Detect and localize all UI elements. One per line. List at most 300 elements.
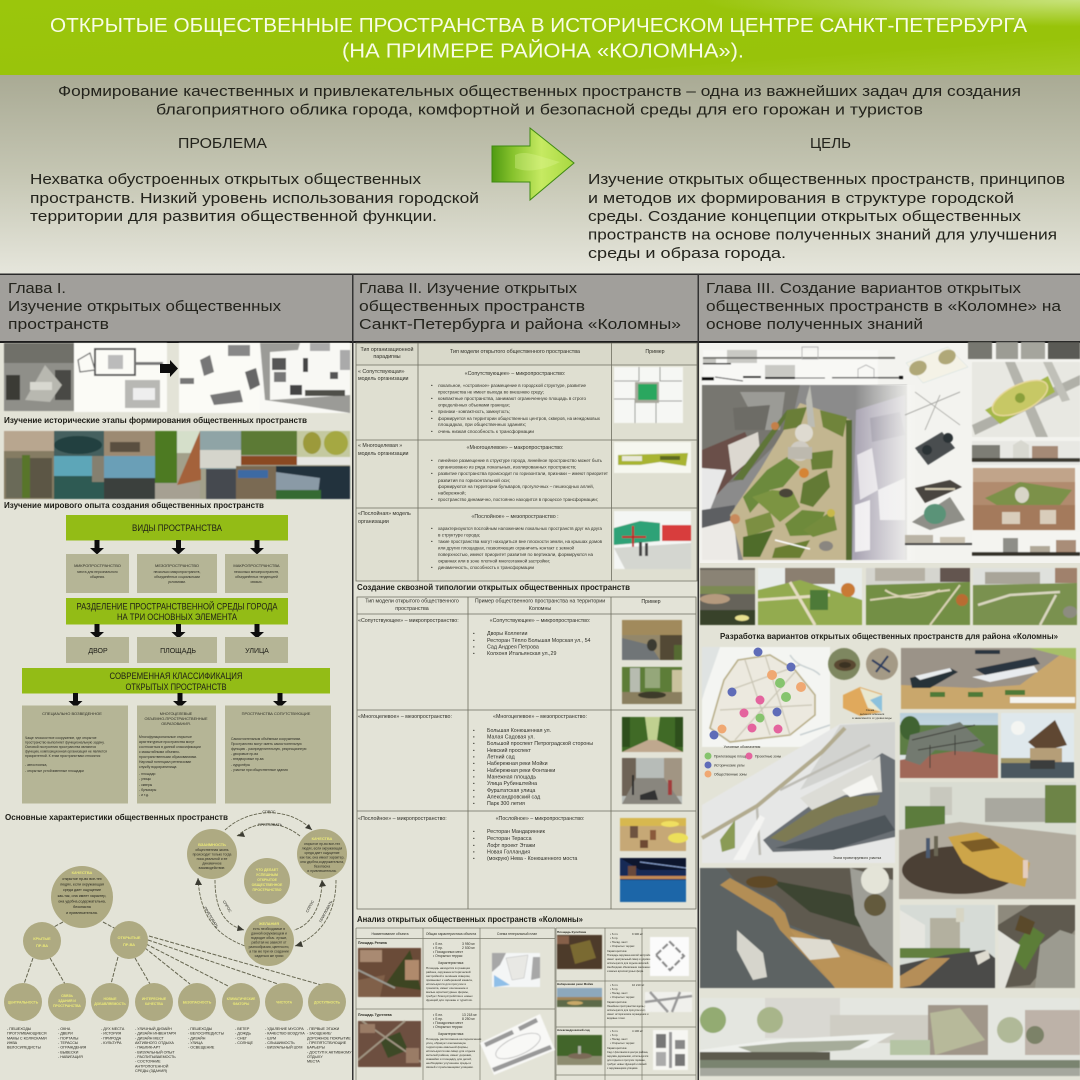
row: multipurpose model: набережной;	[438, 490, 466, 496]
box: accompanying: - внедворовые пр-ва	[231, 757, 264, 761]
caption: main characteristics: Основные характеристики общественных пространств	[5, 813, 228, 822]
example image: linear plan	[614, 442, 691, 473]
row: layered model: организации	[358, 519, 389, 525]
row: accompanying model: формируется на территории общественных центров, скверов, на междомовых	[438, 416, 601, 421]
object: Repin square: требует благоустройства и новых	[426, 994, 473, 998]
heading: chapter III: Глава III. Создание вариантов открытых	[706, 281, 1022, 297]
circle: quality: КАЧЕСТВА	[312, 836, 333, 841]
row: multipurpose: •	[473, 734, 475, 740]
goal text: среды и образа города.	[588, 246, 786, 262]
box: accompanying: - участки при общественные здания	[231, 768, 288, 772]
circle: identity: НОВЫЕ	[103, 997, 117, 1001]
circle: interaction: происходит только тогда	[193, 852, 232, 856]
list: pedestrians: - ПЕШЕХОДЫ	[7, 1027, 31, 1031]
circle: quality: и привлекательна.	[307, 869, 337, 873]
map legend: Условные обозначения	[724, 745, 760, 749]
site plan of embankment	[702, 722, 895, 863]
object: Alexander garden: Характеристика:	[607, 1046, 627, 1050]
object: Yusupov garden column: • Открытых террас	[610, 944, 635, 948]
object: Repin square: примыкает к набережной канала,	[426, 978, 473, 982]
table header: Схема генеральный план	[497, 932, 537, 936]
table header: Коломны	[529, 606, 551, 612]
row: multipurpose: Набережная реки Фонтанки	[487, 768, 555, 774]
row: multipurpose: Набережная реки Мойки	[487, 760, 548, 767]
circle: wishes	[244, 916, 294, 966]
site plan of embankment: Эскиз проектируемого участка	[833, 856, 881, 860]
green bar: modern classification: СОВРЕМЕННАЯ КЛАССИФИКАЦИЯ	[110, 671, 243, 682]
box: micro: места для персонального	[77, 570, 118, 574]
diagram: qualities tree	[4, 866, 352, 1073]
table header	[365, 598, 661, 612]
row: multipurpose: •	[473, 754, 475, 760]
circle: qualities: среда дает ощущение	[63, 888, 101, 892]
box: meso: несколько микропространств,	[154, 570, 200, 574]
object: Turgenev square	[358, 1013, 555, 1075]
circle: building connection: ПРОСТРАНСТВА	[53, 1004, 81, 1008]
object: Turgenev square: необходимо улучшение среды и	[426, 1061, 471, 1065]
row: layered: «Послойное» – микропространство:	[496, 815, 584, 822]
panel: chapter III column	[700, 342, 1080, 1076]
circle: qualities: как-так, она имеет характер,	[58, 894, 106, 898]
row: accompanying	[358, 618, 591, 657]
row: multipurpose	[358, 714, 593, 807]
panel: chapter I column	[4, 343, 352, 1073]
list: facades: - ОКНА	[58, 1027, 71, 1031]
list: street design: - СОСТОЯНИЕ	[135, 1060, 161, 1064]
goal text: Изучение открытых общественных пространств, принципов	[588, 172, 1065, 188]
list: access	[307, 1027, 352, 1064]
row: layered: Ресторан Терасса	[487, 836, 532, 842]
circle: climate: ФАКТОРЫ	[233, 1002, 249, 1006]
box: macro: объединённых тенденцией	[235, 575, 278, 579]
list: pedestrians: ПРОГУЛИВАЮЩИЕСЯ	[7, 1032, 47, 1036]
map legend: Прилегающие площади	[714, 754, 752, 758]
row: layered: •	[473, 836, 475, 841]
caption: analysis: Анализ открытых общественных пространств «Коломны»	[357, 915, 584, 924]
map legend: Общественные зоны	[714, 772, 747, 776]
row: accompanying: «Сопутствующее» – микропространство:	[358, 618, 459, 624]
heading: chapter II: Глава II. Изучение открытых	[359, 281, 578, 297]
list: facades: - ДВЕРИ	[58, 1032, 73, 1036]
title banner: (НА ПРИМЕРЕ РАЙОНА «КОЛОМНА»).	[342, 38, 744, 62]
rendering: top view of embankment park	[998, 905, 1075, 988]
row: multipurpose: •	[473, 794, 475, 800]
box: multipurpose: пространственными образованиями.	[139, 755, 197, 759]
circle: wishes: садиться же грязи	[255, 954, 283, 958]
object: Yusupov garden column: Площадь Кулибина	[557, 930, 586, 934]
goal text	[588, 172, 1065, 262]
diagram: demand cycle	[187, 810, 347, 966]
row: multipurpose model: пространство динамично, постоянно находится в процессе трансформации;	[438, 497, 598, 502]
rendering: pergola	[900, 713, 998, 778]
heading: chapter III: основе полученных знаний	[706, 317, 923, 333]
row: multipurpose model: «Многоцелевое» – макропространство:	[467, 445, 563, 451]
row: layered: (мокрую) Нева - Конюшенного моста	[487, 856, 577, 862]
list: weather: - СНЕГ	[235, 1036, 247, 1040]
object: Repin square: • Посадочных мест	[433, 950, 463, 954]
rendering: view along canal	[900, 905, 995, 988]
green bar: modern classification: ОТКРЫТЫХ ПРОСТРАНСТВ	[126, 682, 226, 693]
object: Turgenev square: • Посадочных мест	[433, 1021, 463, 1025]
object: Moika embankment: видовые точки.	[607, 1017, 626, 1020]
circle: identity: ДОБАВЛЯЕМОСТЬ	[94, 1002, 126, 1006]
box: specially built: Чаще плоскостное сооружение, где открытое	[25, 736, 97, 740]
object: Repin square: застройкой и зелёным сквером,	[426, 974, 470, 978]
object: Moika embankment: • Посад. мест	[610, 991, 628, 995]
list: weather	[235, 1027, 253, 1045]
object: Moika embankment: Характеристика:	[607, 1000, 627, 1004]
circle: quality: открытое пр-во все-тех	[304, 842, 340, 846]
lower section	[972, 532, 1080, 558]
box: accompanying	[225, 706, 331, 804]
rendering: riverside pavilion	[1001, 713, 1074, 778]
object: Repin square: малые архитектурные формы,	[426, 990, 469, 994]
row: layered model: характеризуются послойным наложением локальных пространств друг на друга	[438, 525, 602, 531]
row: multipurpose: Фурштатская улица	[487, 788, 535, 794]
title banner	[0, 0, 1080, 75]
intro statement: благоприятного облика города, комфортной и безопасной среды для его горожан и туристов	[156, 102, 923, 118]
heading: chapter I	[8, 281, 282, 333]
box: macro: связью.	[250, 580, 263, 584]
rendering: boats at pier	[901, 648, 1076, 709]
photo: evening embankment	[620, 858, 686, 902]
list: movement: - ВЕЛОСИПЕДИСТЫ	[188, 1032, 224, 1036]
list: cleanliness: - УДАЛЕНИЕ МУСОРА	[265, 1027, 304, 1031]
box: multipurpose	[137, 706, 216, 804]
circle: interesting qualities: КАЧЕСТВА	[145, 1002, 164, 1006]
object: Turgenev square: скамейки и площадку для детей,	[426, 1057, 472, 1061]
chapter header band	[0, 274, 1080, 1080]
object: Moika embankment: используется для прогулок и отдыха,	[607, 1009, 652, 1012]
object: Yusupov garden column: Площадь окружена жилой застройкой,	[607, 953, 654, 957]
site plan with green oval	[972, 362, 1080, 437]
row: multipurpose model: развития по горизонтальной оси;	[438, 477, 510, 483]
photo: pedestrian street	[622, 758, 682, 804]
map of Kolomna district	[702, 647, 830, 778]
object: Alexander garden: для отдыха и прогулок горожан,	[607, 1059, 646, 1062]
object: Turgenev square: 8 250 м²	[462, 1017, 476, 1021]
circle: what makes a successful space: ОТКРЫТОЕ	[257, 878, 278, 882]
table: typology	[357, 597, 696, 909]
object: Moika embankment: • S пл.	[610, 983, 619, 987]
table header: Тип организационной	[361, 346, 413, 353]
object: Moika embankment: Линейное пространство вдоль реки,	[607, 1004, 651, 1008]
object: Repin square: • Открытых террас	[433, 954, 463, 958]
object: Alexander garden: требует новых функций и связей	[607, 1062, 647, 1066]
box: multipurpose: - скверы	[139, 783, 153, 787]
circle: quality: как-так, она имеет характер,	[300, 856, 344, 860]
list: access: - ДОСТУП К АКТИВНОМУ	[307, 1050, 352, 1054]
example image: courtyard plan	[614, 367, 683, 423]
list: spirit of place: - ДУХ МЕСТА	[101, 1027, 125, 1031]
row: multipurpose: «Многоцелевое» – мезопространство:	[493, 714, 587, 720]
box: multipurpose: ОБРАЗОВАНИЯ.	[161, 722, 191, 726]
object: Alexander garden: окружён деревьями, используется	[607, 1054, 649, 1058]
object: Turgenev square: 13 218 м²	[462, 1013, 478, 1017]
table header	[371, 932, 537, 936]
circle: quality: она удобна,содержательна,	[300, 860, 344, 864]
object: Turgenev square: Характеристика:	[438, 1032, 464, 1036]
photo: avenue	[622, 717, 683, 752]
photo: terrace	[620, 818, 688, 851]
circle: interesting qualities: ИНТЕРЕСНЫЕ	[142, 997, 167, 1001]
box: multipurpose: ОБЪЕМНО-ПРОСТРАНСТВЕННЫЕ	[145, 717, 208, 721]
list: access: ОТДЫХУ	[307, 1055, 323, 1059]
table header: Общая характеристика объекта	[426, 932, 476, 936]
list: movement: - ПЕШЕХОДЫ	[188, 1027, 212, 1031]
box: specially built: - открытые устойчивенные площадки	[25, 769, 84, 773]
table header: Тип модели открытого общественного пространства	[450, 349, 580, 355]
box: micro: МИКРОПРОСТРАНСТВО	[74, 563, 121, 568]
box: accompanying: - дворовые пр-ва	[231, 752, 258, 756]
row: multipurpose model	[358, 443, 609, 502]
small plan fragments	[905, 347, 1070, 545]
heading: chapter II	[359, 281, 681, 333]
list: access: - ПРЕПЯТСТВУЮЩИЕ	[307, 1041, 347, 1045]
heading: chapter III: общественных пространств в «Коломне» на	[706, 299, 1062, 315]
row: accompanying: Сад Андрея Петрова	[487, 644, 539, 650]
project sheet: main view and plans	[700, 342, 1080, 563]
object: Turgenev square: жителей района, имеет дорожки,	[426, 1053, 472, 1057]
row: multipurpose: Парк 300 летия	[487, 801, 525, 807]
circle: building connection	[48, 983, 86, 1021]
row: multipurpose: •	[473, 801, 475, 806]
circle: wishes: разнообразия, цветности,	[249, 945, 289, 949]
box: macro: МАКРОПРОСТРАНСТВА	[233, 563, 280, 568]
list: access: БАРЬЕРЫ	[307, 1046, 325, 1050]
caption: variants development: Разработка вариантов открытых общественных пространств для района «Коломны»	[720, 632, 1059, 641]
circle: what makes a successful space: ОБЩЕСТВЕННОЕ	[252, 883, 283, 887]
intro statement: Формирование качественных и привлекательных общественных пространств – одна из важнейших задач для создания	[58, 84, 1021, 100]
row: accompanying model: «Сопутствующее» – микропространство:	[465, 371, 565, 377]
box: micro	[66, 554, 129, 593]
object: Repin square: • S пр.	[433, 946, 443, 950]
object: Alexander garden: 4 100 м²	[632, 1029, 643, 1033]
row: multipurpose model: формируются на территории бульваров, прогулочных – пешеходных аллей,	[438, 483, 594, 489]
object: Moika embankment: 10 210 м²	[632, 983, 644, 987]
object: Moika embankment: Набережная реки Мойки	[557, 982, 593, 986]
row: accompanying model: локальное, «островное» размещение в городской структуре, развитие	[438, 382, 586, 388]
box: specially built: приоритетной. К этим пространствам относятся	[25, 754, 100, 758]
map legend: Исторические узлы	[714, 764, 745, 768]
box: multipurpose: - площади	[139, 772, 155, 776]
circle: accessibility	[308, 983, 346, 1021]
circle: wishes: а так же при их создании	[249, 950, 289, 954]
box: multipurpose: Научный потенциал ретенизован	[139, 760, 191, 764]
caption: world experience: Изучение мирового опыта создания общественных пространств	[4, 501, 264, 510]
list: spirit of place: - КУЛЬТУРА	[101, 1041, 122, 1045]
box: macro	[225, 554, 288, 593]
object: Yusupov garden column: • Посад. мест	[610, 940, 628, 944]
panel: chapter II column	[356, 343, 697, 1080]
object: Yusupov garden column: • S пл.	[610, 932, 619, 936]
problem text: территории для развития общественной функции.	[30, 209, 437, 225]
row: multipurpose model: модель организации	[358, 451, 409, 457]
row: multipurpose: •	[473, 781, 475, 786]
map markers	[710, 648, 806, 740]
row: accompanying model	[358, 369, 601, 434]
row: multipurpose model: « Многоцелевая »	[358, 443, 402, 449]
object: Alexander garden: • Открытых террас	[610, 1041, 635, 1045]
box: multipurpose: с масштабными объемно-	[139, 750, 180, 754]
row: layered model: поверхностью, имеют приоритет развития по вертикали, формируются на	[438, 552, 593, 557]
green bar: modern classification	[22, 668, 330, 694]
row: accompanying: •	[473, 638, 475, 643]
box: specially built: пространство выполняет функциональную задачу.	[25, 740, 105, 744]
circle: qualities	[51, 866, 113, 928]
green bar: types of space	[66, 515, 288, 540]
box: yard: ДВОР	[88, 648, 108, 655]
row: accompanying: •	[473, 644, 475, 650]
object: Yusupov garden column: Характеристика:	[607, 949, 627, 953]
circle: interaction: ВЗАИМНОСТЬ	[198, 842, 226, 847]
row: multipurpose: •	[473, 741, 475, 746]
row: multipurpose: «Многоцелевое» – мезопространство:	[358, 714, 452, 720]
circle: climate	[222, 983, 260, 1021]
object: Turgenev square: территорию овальной формы,	[426, 1045, 469, 1049]
list: cleanliness: - СЛЫШИМОСТЬ	[265, 1041, 295, 1045]
row: layered model: •	[431, 539, 433, 544]
row: layered	[358, 815, 584, 862]
object: Moika embankment: • Открытых террас	[610, 995, 635, 999]
object: Turgenev square: • S пр.	[433, 1017, 443, 1021]
row: layered model: «Послойное» – мезопространство :	[471, 513, 559, 520]
object: Yusupov garden column	[557, 930, 689, 976]
list: weather: - СОЛНЦЕ	[235, 1041, 253, 1045]
list: weather: - ВЕТЕР	[235, 1027, 250, 1031]
row: accompanying: Ресторан Тёпло Большая Морская ул., 54	[487, 638, 591, 644]
row: multipurpose: Летний сад	[487, 754, 515, 760]
box: specially built: СПЕЦИАЛЬНО ВОЗВЕДЕННОЕ	[42, 711, 102, 716]
row: accompanying model: компактные пространства, занимают ограниченную площадь в строго	[438, 396, 586, 401]
object: Repin square: Площадь находится в границах	[426, 966, 471, 970]
row: multipurpose: Манежная площадь	[487, 774, 536, 780]
list: movement: - ОСВЕЩЕНИЕ	[188, 1046, 215, 1050]
object: Turgenev square: связей с прилегающими улицами.	[426, 1065, 474, 1069]
object: Turgenev square: Площадь расположена на пересечении	[426, 1037, 482, 1041]
box: specially built	[22, 706, 128, 804]
box: specially built: Основой построения пространства являются	[25, 745, 96, 749]
box: multipurpose: соотноситься в данной классификации	[139, 745, 201, 749]
table header: парадигмы	[373, 354, 401, 360]
circle: interaction: динамичное	[202, 862, 222, 866]
row: layered model: •	[431, 526, 433, 531]
circle: wishes: подходит обыч. лучше,	[251, 936, 287, 940]
tree connectors	[24, 922, 325, 986]
circle: open spaces: ПР-ВА	[123, 942, 135, 947]
title banner: ОТКРЫТЫЕ ОБЩЕСТВЕННЫЕ ПРОСТРАНСТВА В ИСТОРИЧЕСКОМ ЦЕНТРЕ САНКТ-ПЕТЕРБУРГА	[50, 15, 1028, 37]
round detail views and water scheme: зеленого освоения	[860, 712, 885, 716]
row: layered model: «Послойная» модель	[358, 510, 411, 517]
box: meso: МЕЗОПРОСТРАНСТВО	[155, 563, 199, 568]
list: spirit of place	[101, 1027, 125, 1045]
table header: Пример	[645, 349, 665, 355]
table header	[361, 346, 665, 360]
row: layered: Ресторан Мандаринник	[487, 829, 546, 835]
problem text	[30, 172, 479, 225]
row: accompanying model: признаки - компактность, замкнутость;	[438, 409, 510, 414]
row: multipurpose: Александровский сад	[487, 794, 540, 800]
list: movement	[188, 1027, 224, 1050]
object: Alexander garden: • S пл.	[610, 1029, 619, 1033]
cycle arrows	[198, 813, 336, 946]
list: cleanliness: - КАЧЕСТВО ВОЗДУХА	[265, 1032, 305, 1036]
row: multipurpose: •	[473, 774, 475, 780]
row: multipurpose: •	[473, 761, 475, 766]
row: accompanying model: определённых объемами границах;	[438, 402, 510, 408]
arrows down row 2	[90, 624, 264, 638]
object: Yusupov garden column: 9 300 м²	[632, 932, 643, 936]
example image: layered section	[614, 511, 691, 569]
circle: interaction: общественная жизнь	[195, 848, 229, 852]
list: access: МЕСТА	[307, 1060, 320, 1064]
row: multipurpose: Большая Конюшенная ул.	[487, 728, 551, 734]
label: demand right: СПРОС	[305, 899, 315, 913]
caption: typology: Создание сквозной типологии открытых общественных пространств	[357, 583, 630, 592]
green bar: division into three elements: РАЗДЕЛЕНИЕ ПРОСТРАНСТВЕННОЙ СРЕДЫ ГОРОДА	[76, 600, 278, 612]
heading: chapter I: Глава I.	[8, 281, 66, 297]
object: Yusupov garden column: • S пр.	[610, 936, 618, 940]
heading: chapter I: пространств	[8, 317, 109, 333]
historic images row	[4, 343, 350, 413]
circle: what makes a successful space: ЧТО ДЕЛАЕТ	[256, 868, 279, 872]
goal text: и методов их формирования в структуре городской	[588, 191, 1014, 207]
row: accompanying model: •	[431, 409, 433, 414]
row: accompanying model: •	[431, 429, 433, 434]
green bar: division into three elements	[66, 598, 288, 624]
list: facades: - НАВИГАЦИЯ	[58, 1055, 83, 1059]
circle: safety: БЕЗОПАСНОСТЬ	[183, 1000, 212, 1004]
list: pedestrians: ИНВА	[7, 1041, 18, 1045]
object: Turgenev square: • S пл.	[433, 1013, 443, 1017]
box: accompanying: Пространство могут иметь самостоятельную	[231, 742, 302, 746]
circle: quality: людях, если окружающая	[302, 846, 342, 850]
list: access: - ПЕРВЫЕ ЭТАЖИ	[307, 1027, 340, 1031]
box: square: ПЛОЩАДЬ	[160, 648, 196, 655]
row: multipurpose model: организовано из ряда локальных, изолированных пространств;	[438, 464, 576, 470]
problem text: Нехватка обустроенных открытых общественных	[30, 172, 422, 188]
map legend	[704, 745, 782, 778]
box: multipurpose: - и т.д.	[139, 793, 149, 797]
row: multipurpose model: •	[431, 458, 433, 463]
green bar: division into three elements: НА ТРИ ОСНОВНЫХ ЭЛЕМЕНТА	[117, 612, 238, 623]
list: street design: СРЕДЫ (ЗДАНИЯ)	[135, 1069, 167, 1073]
list: street design: - РАСПИТЫВАЕМОСТЬ	[135, 1055, 176, 1059]
round detail views and water scheme	[828, 648, 898, 720]
circle: enclosed spaces: КРЫТЫЕ	[33, 936, 51, 941]
list: street design: - УЛИЧНЫЙ ДИЗАЙН	[135, 1027, 172, 1031]
list: street design: АКТИВНОГО ОТДЫХА	[135, 1041, 174, 1045]
list: facades: - ТЕРАССЫ	[58, 1041, 78, 1045]
list: access: - ЗАОЩЕНИЕ/	[307, 1032, 332, 1036]
object: Moika embankment	[557, 982, 692, 1020]
circle: qualities: открытое пр-во все-тех	[62, 877, 102, 881]
list: street design: - ПАБЛИК-АРТ	[135, 1046, 161, 1050]
label: attract right: ПРИГЛОВАТЬ	[319, 899, 334, 923]
object: Repin square: 2 530 м²	[462, 946, 476, 950]
circle: building connection: СВЯЗЬ	[61, 994, 73, 998]
row: accompanying: Дворы Коллегии	[487, 631, 527, 637]
caption: historical stages: Изучение исторические этапы формирования общественных пространств	[4, 416, 307, 425]
row: multipurpose: •	[473, 728, 475, 733]
intro statement	[58, 84, 1021, 118]
row: accompanying model: площадках, при общественных зданиях;	[438, 422, 526, 427]
row: accompanying: •	[473, 631, 475, 636]
row: multipurpose model: •	[431, 497, 433, 502]
row: layered: Новая Голландия	[487, 850, 530, 856]
list: spirit of place: - ПРИРОДА	[101, 1036, 122, 1040]
list: cleanliness	[265, 1027, 305, 1050]
